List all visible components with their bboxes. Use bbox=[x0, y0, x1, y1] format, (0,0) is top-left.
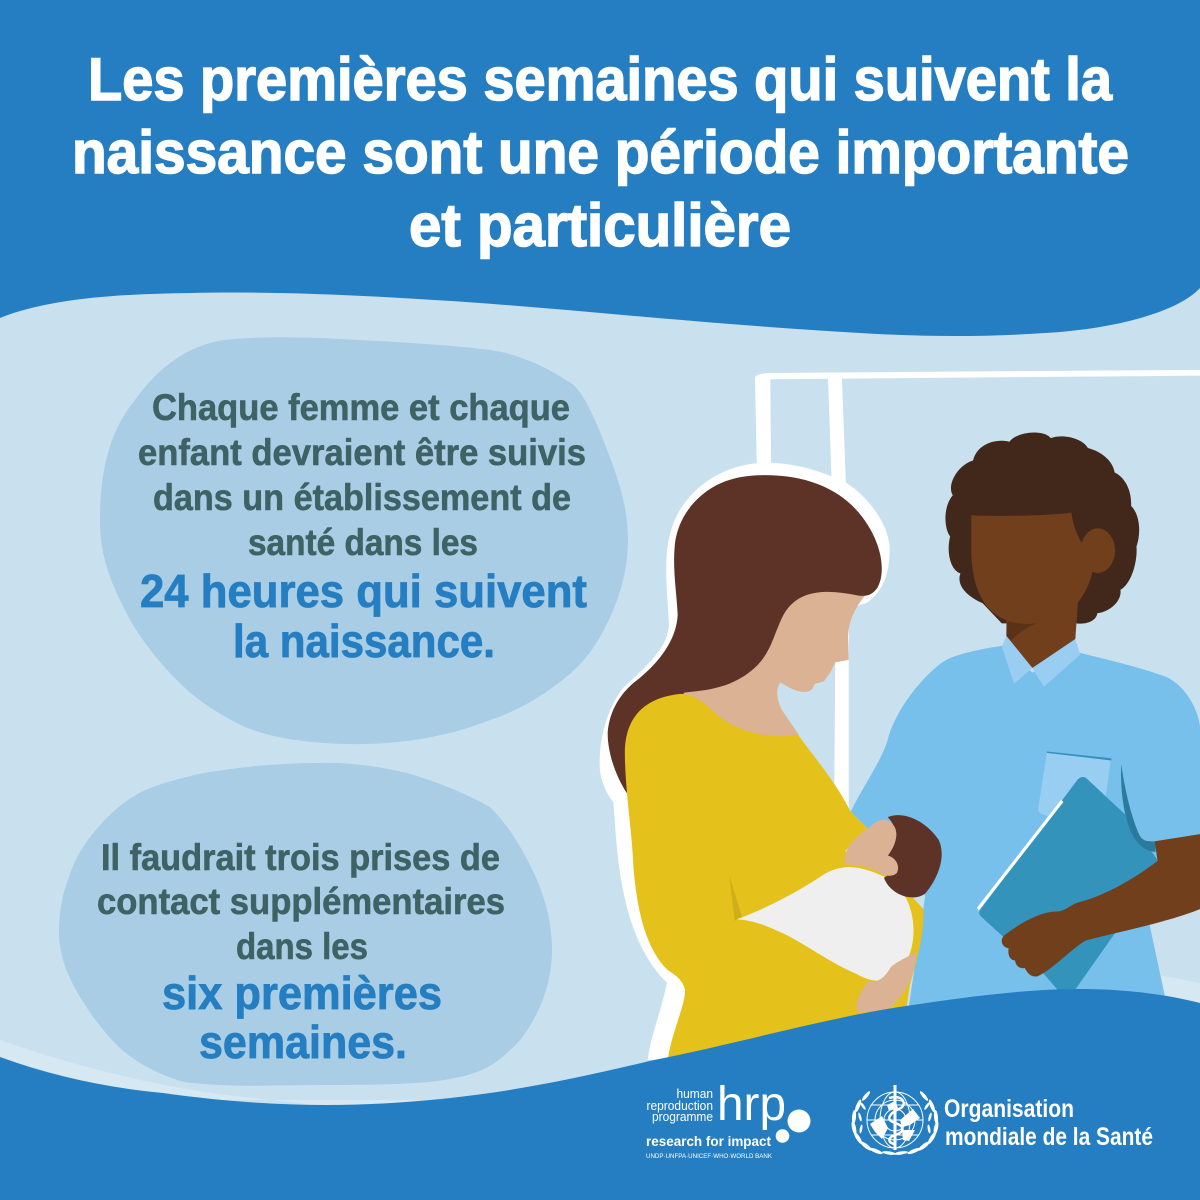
text: additional contacts: contact supplémentaires bbox=[97, 881, 505, 922]
mother sweater bbox=[625, 694, 923, 1057]
hrp descriptor: human bbox=[676, 1086, 713, 1101]
worker face bbox=[971, 513, 1092, 624]
hrp circles bbox=[788, 1110, 810, 1132]
logo: WHO emblem bbox=[851, 1085, 939, 1156]
baby head bbox=[884, 815, 942, 897]
logo: WHO name bbox=[944, 1095, 1153, 1151]
text: follow-up recommendation: enfant devraient être suivis bbox=[138, 432, 586, 473]
text: follow-up recommendation: santé dans les bbox=[248, 522, 478, 563]
pocket bbox=[1038, 753, 1111, 829]
hrp tagline: research for impact bbox=[646, 1133, 771, 1149]
text: follow-up recommendation: dans un établissement de bbox=[153, 477, 571, 518]
emblem laurel left bbox=[851, 1090, 896, 1156]
worker shirt bbox=[851, 646, 1200, 1012]
title bbox=[72, 46, 1129, 259]
logo: HRP bbox=[646, 1078, 810, 1160]
hrp partners: UNDP·UNFPA·UNICEF·WHO·WORLD BANK bbox=[646, 1153, 773, 1160]
hrp descriptor: reproduction bbox=[646, 1098, 713, 1113]
title: et particulière bbox=[409, 192, 791, 259]
text: additional contacts bbox=[97, 837, 505, 967]
mother hair bbox=[608, 475, 882, 793]
title: naissance sont une période importante bbox=[72, 119, 1129, 186]
worker hair bbox=[945, 433, 1139, 624]
top header band bbox=[0, 0, 1200, 336]
text: 24 hours highlight: la naissance. bbox=[233, 615, 495, 667]
mother lower hand bbox=[856, 952, 916, 1013]
text: 24 hours highlight bbox=[140, 565, 587, 667]
text: six weeks highlight bbox=[162, 967, 442, 1068]
panel: six weeks bubble bbox=[59, 763, 552, 1086]
text: additional contacts: Il faudrait trois prises de bbox=[101, 837, 500, 878]
text: 24 hours highlight: 24 heures qui suivent bbox=[140, 565, 587, 617]
emblem globe bbox=[867, 1092, 923, 1148]
emblem staff bbox=[894, 1085, 896, 1150]
emblem serpent bbox=[889, 1097, 904, 1144]
hrp letters: hrp bbox=[717, 1078, 786, 1131]
sweater fold bbox=[729, 876, 742, 921]
hrp descriptor bbox=[646, 1086, 713, 1124]
baby blanket bbox=[737, 867, 914, 981]
panel: 24 hours bubble bbox=[100, 337, 628, 744]
pocket edge bbox=[1047, 752, 1112, 760]
worker collar bbox=[1002, 636, 1080, 687]
sleeve over folder bbox=[1121, 753, 1200, 841]
logo: WHO name: mondiale de la Santé bbox=[945, 1123, 1153, 1151]
mother white outline bbox=[600, 463, 890, 1060]
mother bbox=[600, 463, 942, 1060]
logo: WHO name: Organisation bbox=[944, 1095, 1074, 1123]
mother upper hand bbox=[845, 820, 898, 876]
folder edge highlight bbox=[977, 800, 1063, 910]
emblem land bbox=[870, 1101, 920, 1141]
hrp descriptor: programme bbox=[652, 1109, 713, 1124]
worker neck bbox=[1006, 597, 1078, 668]
illustration: mother, baby and health worker bbox=[600, 370, 1200, 1060]
bottom footer band bbox=[0, 989, 1200, 1200]
emblem laurel right bbox=[894, 1090, 939, 1156]
text: six weeks highlight: semaines. bbox=[199, 1016, 407, 1068]
folder bbox=[979, 777, 1158, 992]
text: six weeks highlight: six premières bbox=[162, 967, 442, 1019]
worker arm and hand bbox=[1002, 834, 1200, 977]
text: additional contacts: dans les bbox=[236, 926, 368, 967]
light wave band at bottom bbox=[0, 976, 1200, 1106]
text: follow-up recommendation bbox=[138, 387, 586, 563]
worker ear bbox=[1081, 528, 1115, 573]
sleeve shadow bbox=[1121, 764, 1156, 852]
text: follow-up recommendation: Chaque femme et chaque bbox=[152, 387, 570, 428]
window frame bbox=[755, 370, 1200, 815]
mother face and neck bbox=[680, 583, 868, 762]
health worker bbox=[851, 433, 1200, 1012]
title: Les premières semaines qui suivent la bbox=[88, 46, 1113, 113]
worker neck shadow bbox=[1006, 621, 1038, 640]
